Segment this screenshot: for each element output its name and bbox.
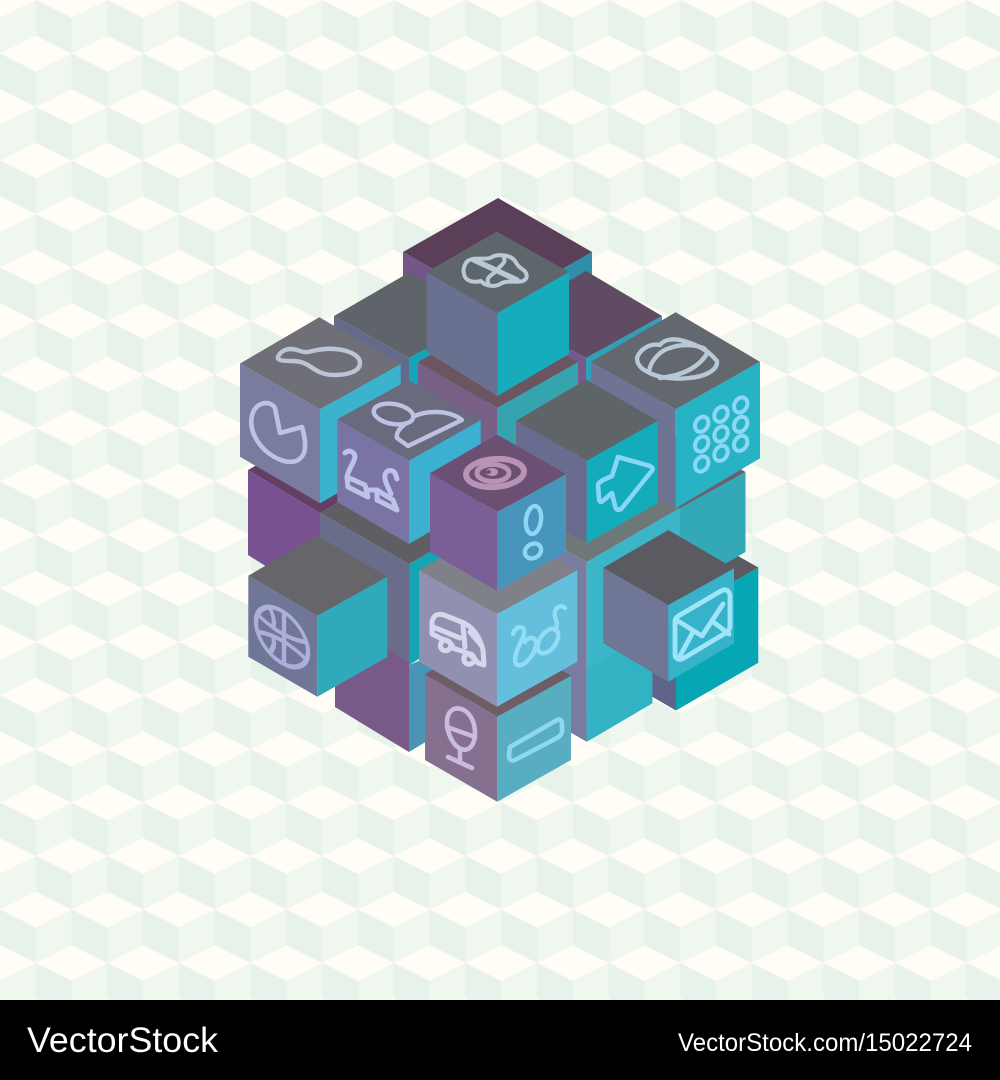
icon: envelope xyxy=(675,590,730,659)
block: glasses and person cube xyxy=(337,380,481,544)
footer image id: VectorStock.com/15022724 xyxy=(678,1029,972,1057)
block: truck and glasses cube xyxy=(419,527,577,707)
block: right lower teal cube xyxy=(615,434,746,590)
icon: wine glass xyxy=(447,709,475,768)
icon: nine dots xyxy=(692,395,750,474)
icon: spiral target xyxy=(465,457,525,489)
icon: glasses xyxy=(345,451,397,510)
block: central grey cube xyxy=(320,462,498,665)
icon: exclamation xyxy=(522,505,544,561)
icon: striped ball xyxy=(637,339,717,379)
block: middle purple cube xyxy=(418,318,578,490)
footer bar xyxy=(0,1000,1000,1080)
icon: person xyxy=(372,401,462,446)
block: globe cube xyxy=(248,536,387,697)
icon: pie chart xyxy=(251,403,305,462)
block: back left grey cube xyxy=(334,272,485,444)
icon: round glasses xyxy=(513,606,565,665)
block: top left cube with pin and pie xyxy=(240,317,401,503)
isometric cube stack xyxy=(240,198,760,802)
block: cube behind mail xyxy=(594,521,758,710)
block: top right cube with balloon and dots xyxy=(591,312,760,508)
block: back top purple cube xyxy=(403,198,592,392)
icon: globe xyxy=(256,596,308,678)
icon: bowling pin xyxy=(278,349,360,375)
block: eye cube xyxy=(430,434,566,591)
block: central teal cube xyxy=(500,450,680,742)
icon: knot xyxy=(464,255,527,286)
block: arrow cube xyxy=(516,380,658,543)
icon: truck xyxy=(432,614,484,665)
icon: rounded bar xyxy=(509,720,562,760)
block: back right purple cube xyxy=(510,271,662,444)
block: wine cube xyxy=(425,632,571,802)
block: top cube with knot icon xyxy=(427,232,569,396)
block: lower left purple cube xyxy=(335,620,470,752)
icon: arrow xyxy=(598,457,653,510)
footer brand: VectorStock xyxy=(27,1021,219,1060)
block: mail cube xyxy=(603,530,734,682)
block: purple left cube xyxy=(248,430,392,600)
